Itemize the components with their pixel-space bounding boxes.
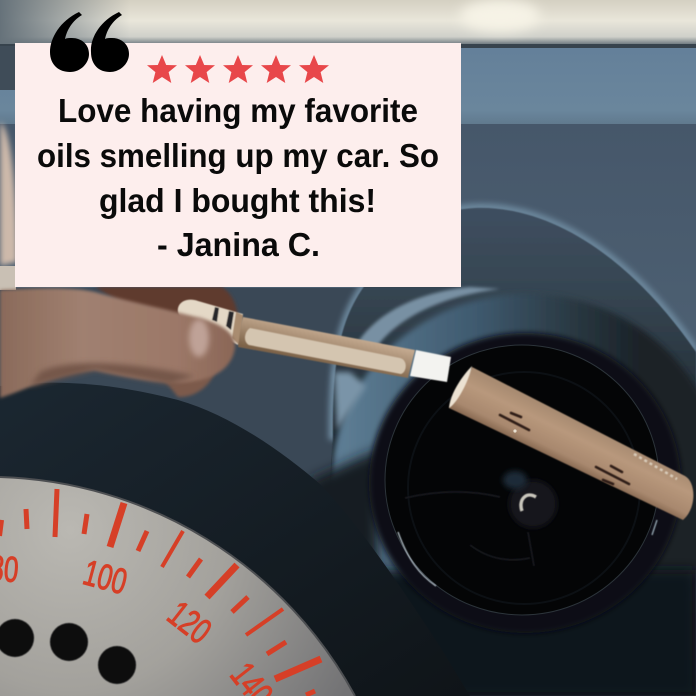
pale patch at left below finger xyxy=(0,266,16,290)
review panel xyxy=(15,12,461,287)
thumb underside shading xyxy=(30,363,195,386)
gauge rim xyxy=(0,477,355,696)
vent right highlight xyxy=(652,520,657,535)
gauge numbers: 100 xyxy=(79,552,131,602)
gauge numbers xyxy=(0,548,281,696)
back finger of hand xyxy=(95,287,238,335)
vent housing xyxy=(320,208,696,696)
thumbnail xyxy=(189,319,209,357)
hand thumb xyxy=(0,288,235,398)
review quote text: Love having my favorite xyxy=(58,92,418,129)
windshield glare xyxy=(0,0,696,46)
vent housing lit band xyxy=(332,295,696,578)
review quote text: oils smelling up my car. So xyxy=(37,137,439,174)
tube vent slots xyxy=(500,413,629,484)
gauge ticks xyxy=(0,489,321,695)
vent lower highlight xyxy=(398,532,436,586)
vent outer ring xyxy=(369,333,681,633)
windshield left shade xyxy=(0,0,130,46)
diffuser tube body xyxy=(449,367,693,520)
bright windshield spot xyxy=(460,0,540,32)
vent knob crescent xyxy=(521,495,536,511)
gauge numbers: 120 xyxy=(160,593,219,652)
vent louvers xyxy=(405,492,534,566)
vent knob xyxy=(509,480,557,528)
upper dashboard blue band xyxy=(0,48,696,126)
lower dashboard surface xyxy=(0,124,696,424)
diffuser stick inset panel xyxy=(245,328,406,374)
gauge indicator dots xyxy=(0,619,136,684)
diffuser white felt tip xyxy=(410,350,451,382)
tube open end xyxy=(449,366,472,408)
lower finger under thumb xyxy=(160,370,215,397)
textured dash left of vent xyxy=(0,288,372,508)
upper left dark patch xyxy=(0,46,15,90)
review quote text: glad I bought this! xyxy=(99,182,376,219)
lower right dark xyxy=(340,570,696,696)
windshield base strip xyxy=(0,44,696,48)
diffuser stick cap xyxy=(178,300,243,346)
vent bezel ring xyxy=(385,345,659,615)
reviewer name: - Janina C. xyxy=(157,226,320,263)
diffuser stick body xyxy=(238,317,415,378)
tube logo marks xyxy=(634,454,677,479)
instrument cowl xyxy=(0,383,470,696)
icon: quotation marks xyxy=(50,12,129,72)
vent knob blue reflection xyxy=(503,471,527,489)
review quote text xyxy=(37,92,439,263)
vent inner ring xyxy=(408,372,640,604)
blurred finger behind panel xyxy=(0,122,17,266)
vent housing lower pale patch xyxy=(334,372,366,430)
tube slot highlight xyxy=(513,429,517,433)
vent housing rim highlight xyxy=(333,208,696,440)
dark shade between cowl and vent xyxy=(310,450,378,696)
five star rating xyxy=(147,55,329,83)
gauge face xyxy=(0,477,355,696)
vent housing pale textured band xyxy=(352,287,500,352)
